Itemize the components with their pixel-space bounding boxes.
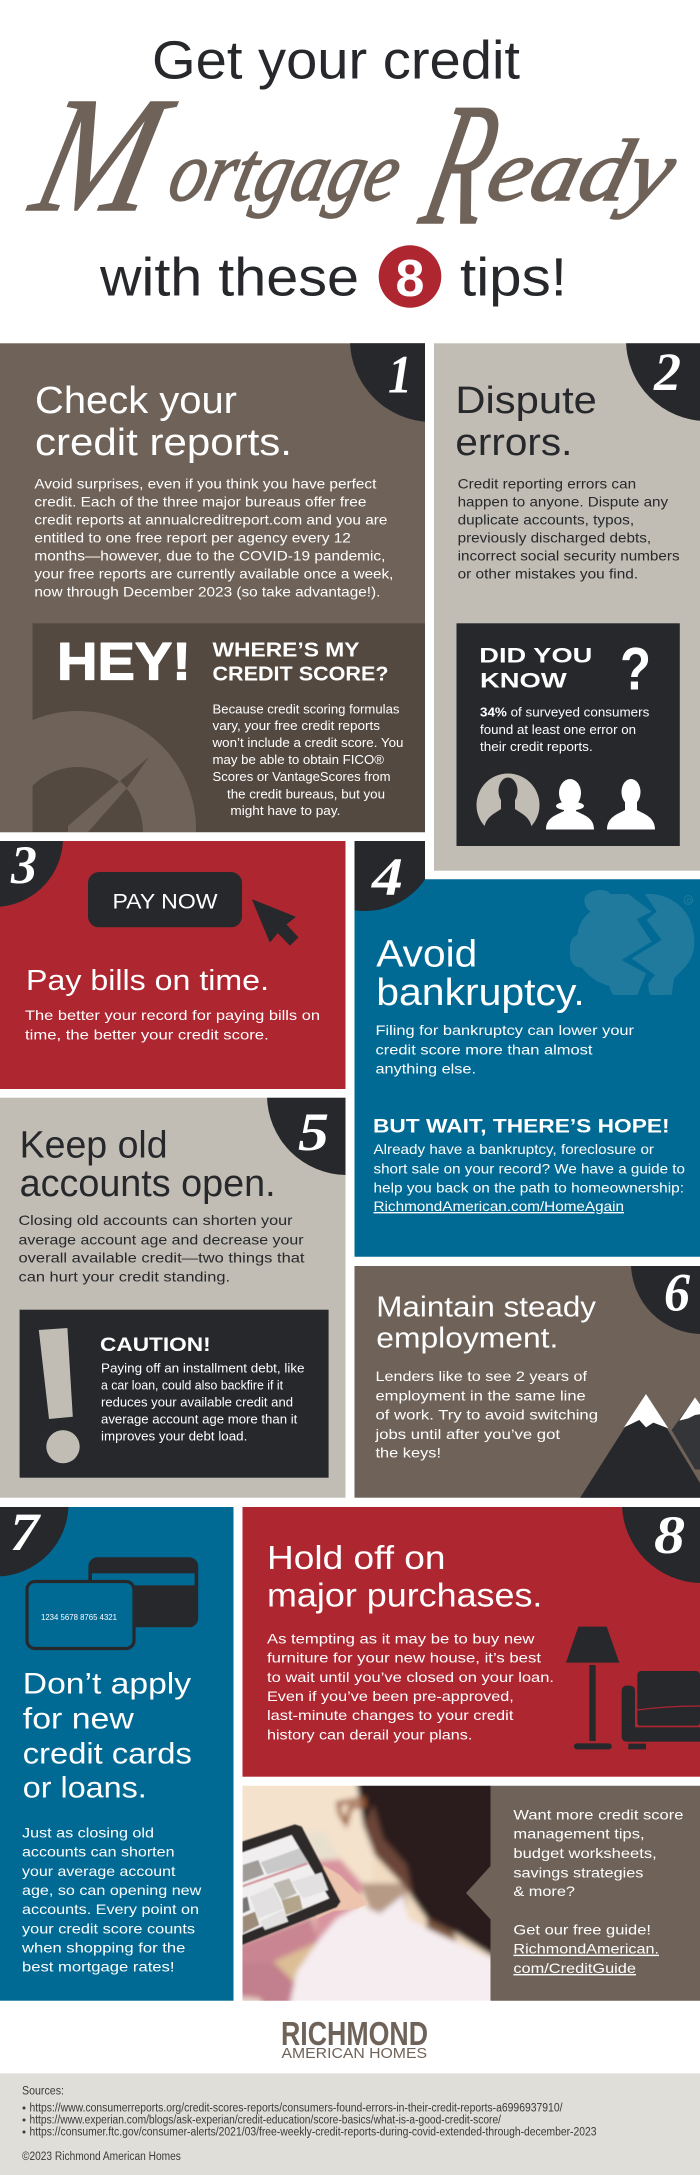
logo: Richmond American Homes (281, 2015, 428, 2062)
footer: sources (0, 2073, 700, 2175)
number badge 2: 2 (653, 342, 681, 402)
callout body: 34% of surveyed consumers (480, 705, 650, 720)
body text: tip 4: anything else. (376, 1061, 476, 1077)
body text: tip 5: average account age and decrease your (18, 1231, 304, 1247)
number badge 8: 8 (654, 1505, 685, 1565)
call to action text: savings strategies (513, 1864, 643, 1880)
badge: number 8: 8 (396, 250, 424, 308)
heading: don't apply for new credit cards or loans: or loans. (23, 1772, 147, 1805)
number badge 4 (354, 841, 426, 911)
number badge 4: 4 (371, 847, 403, 907)
panel: tip 3 pay bills on time (0, 841, 346, 1089)
heading: don't apply for new credit cards or loans: credit cards (23, 1737, 192, 1770)
subheading: but wait there's hope: BUT WAIT, THERE’S HOPE! (373, 1116, 670, 1138)
body text: tip 2: incorrect social security numbers (458, 547, 680, 563)
callout body: average account age more than it (101, 1411, 298, 1426)
body text: tip 7: when shopping for the (21, 1940, 186, 1956)
callout body: won’t include a credit score. You (211, 735, 404, 750)
heading: keep old accounts open: Keep old (20, 1124, 168, 1166)
call to action text: management tips, (513, 1826, 645, 1842)
body text: tip 1: your free reports are currently available once a week, (34, 566, 393, 582)
body text: tip 6: Lenders like to see 2 years of (376, 1368, 587, 1384)
body text: tip 4: credit score more than almost (376, 1041, 593, 1057)
call to action text: budget worksheets, (513, 1845, 657, 1861)
body text: hope: RichmondAmerican.com/HomeAgain (374, 1198, 624, 1214)
body text: tip 5: can hurt your credit standing. (18, 1269, 230, 1285)
body text: hope: short sale on your record? We have a guide to (374, 1160, 685, 1176)
callout body (101, 1360, 304, 1443)
question mark: ? (620, 635, 651, 702)
heading: dispute errors (455, 380, 597, 464)
body text: tip 7: accounts can shorten (22, 1844, 174, 1860)
panel: tip 1 check your credit reports (0, 343, 425, 832)
callout heading: CREDIT SCORE? (212, 664, 388, 686)
title line: tips: tips! (460, 248, 567, 308)
icon: exclamation mark (39, 1328, 80, 1463)
number badge 3: 3 (10, 835, 37, 895)
icon: lamp and sofa (566, 1627, 700, 1749)
title line: with these: with these (99, 248, 359, 308)
heading: don't apply for new credit cards or loans: Don’t apply (23, 1667, 191, 1700)
callout body: found at least one error on (480, 722, 636, 737)
body text: tip 1: Avoid surprises, even if you think you have perfect (34, 475, 377, 491)
body text: tip 8: last-minute changes to your credit (267, 1707, 514, 1723)
body text: tip 2: or other mistakes you find. (458, 566, 638, 582)
callout heading: DID YOU (479, 644, 592, 668)
heading: check your credit reports (35, 380, 292, 464)
body text: tip 5 (18, 1212, 305, 1285)
body text: tip 1: credit. Each of the three major bureaus offer free (34, 494, 367, 510)
callout body: might have to pay. (230, 803, 340, 818)
body text: tip 5: Closing old accounts can shorten your (18, 1212, 293, 1228)
body text: tip 2: duplicate accounts, typos, (458, 511, 634, 527)
call to action text: & more? (513, 1883, 575, 1899)
body text: tip 3: time, the better your credit score. (25, 1026, 269, 1042)
body text: tip 7 (21, 1824, 202, 1975)
panel: tip 2 dispute errors (434, 343, 700, 871)
heading: dispute errors: errors. (455, 422, 572, 464)
body text: tip 7: accounts. Every point on (22, 1901, 199, 1917)
callout body (211, 701, 404, 818)
icon: mountains (580, 1394, 700, 1498)
body text: hope: Already have a bankruptcy, foreclosure or (374, 1141, 654, 1157)
script heading: Mortgage Ready: ortgage (161, 124, 411, 219)
title block (13, 30, 700, 308)
heading: maintain steady employment: employment. (376, 1323, 558, 1355)
callout body (480, 705, 650, 754)
body text: tip 8: furniture for your new house, it’s best (267, 1650, 541, 1666)
body text: tip 7: age, so can opening new (22, 1882, 202, 1898)
callout heading (212, 640, 388, 686)
body text: tip 6 (374, 1368, 598, 1461)
heading: check your credit reports: Check your (35, 380, 237, 422)
sources list: https://www.consumerreports.org/credit-scores-reports/consumers-found-errors-in-their-credit-reports-a6996937910/ (30, 2103, 563, 2115)
heading: don't apply for new credit cards or loans: for new (23, 1702, 134, 1735)
pay now button: PAY NOW (112, 890, 218, 914)
badge: number 8 (379, 245, 441, 308)
script heading: Mortgage Ready: M (17, 64, 188, 246)
body text: tip 2: happen to anyone. Dispute any (458, 494, 668, 510)
call to action panel with notch (466, 1786, 700, 2001)
call to action text: Want more credit score (513, 1806, 684, 1822)
icon: cursor arrow (253, 900, 298, 945)
icon: credit cards (27, 1557, 198, 1648)
logo: Richmond American Homes: RICHMOND (281, 2015, 428, 2052)
heading: keep old accounts open (20, 1124, 276, 1205)
sources heading: Sources: (22, 2086, 64, 2098)
panel: tip 7 don't apply for new credit (0, 1507, 234, 2001)
callout body: may be able to obtain FICO® (212, 752, 384, 767)
number badge 1 (350, 343, 425, 422)
body text: tip 1: credit reports at annualcreditreport.com and you are (34, 511, 388, 527)
body text: tip 2: previously discharged debts, (458, 529, 651, 545)
heading: maintain steady employment (376, 1292, 597, 1355)
panel: tip 5 keep old accounts open (0, 1098, 346, 1498)
body text: tip 5: overall available credit—two things that (18, 1250, 305, 1266)
callout body: the credit bureaus, but you (227, 786, 385, 801)
call to action text: Get our free guide! (513, 1922, 651, 1938)
call to action text: com/CreditGuide (513, 1960, 636, 1976)
sources list: https://consumer.ftc.gov/consumer-alerts/2021/03/free-weekly-credit-reports-during-covid-extended-through-december-2023 (30, 2127, 596, 2139)
body text: hope (374, 1141, 685, 1214)
icon: three person silhouettes (476, 774, 655, 830)
body text: tip 6: the keys! (376, 1445, 441, 1461)
heading: avoid bankruptcy: bankruptcy. (376, 972, 585, 1014)
body text: tip 3 (25, 1007, 320, 1042)
body text: tip 8: As tempting as it may be to buy new (267, 1630, 535, 1646)
body text: tip 7: your average account (22, 1863, 176, 1879)
callout body: vary, your free credit reports (212, 718, 381, 733)
callout heading: KNOW (480, 669, 568, 693)
body text: tip 1 (34, 475, 393, 600)
body text: tip 8: to wait until you’ve closed on your loan. (267, 1669, 554, 1685)
call to action text: RichmondAmerican. (513, 1941, 659, 1957)
callout heading (479, 644, 592, 693)
callout heading: WHERE’S MY (212, 640, 360, 662)
title line: get your credit: Get your credit (152, 30, 520, 90)
heading: avoid bankruptcy: Avoid (376, 934, 477, 976)
logo: Richmond American Homes: AMERICAN HOMES (282, 2045, 427, 2062)
pay now button (88, 872, 242, 927)
number badge 2 (626, 343, 700, 421)
number badge 6 (631, 1266, 700, 1334)
callout body: Because credit scoring formulas (212, 701, 400, 716)
body text: tip 8: history can derail your plans. (267, 1726, 472, 1742)
icon: broken piggy bank (570, 890, 694, 995)
body text: tip 8: Even if you’ve been pre-approved, (267, 1688, 514, 1704)
number badge 8 (622, 1507, 700, 1583)
icon: gauge (32, 711, 196, 832)
body text: tip 7: best mortgage rates! (22, 1959, 174, 1975)
script heading: Mortgage Ready: eady (478, 122, 686, 220)
panel: tip 4 avoid bankruptcy (354, 841, 700, 1257)
sources list (22, 2103, 596, 2139)
number badge 7: 7 (10, 1502, 41, 1562)
body text: tip 1: entitled to one free report per agency every 12 (34, 529, 351, 545)
body text: tip 1: months—however, due to the COVID-19 pandemic, (34, 547, 385, 563)
body text: tip 6: jobs until after you’ve got (374, 1426, 560, 1442)
callout: where's my credit score (32, 623, 425, 832)
callout: did you know (456, 623, 680, 846)
body text: tip 3: The better your record for paying bills on (25, 1007, 320, 1023)
number badge 7 (0, 1507, 68, 1576)
heading: maintain steady employment: Maintain steady (376, 1292, 597, 1324)
callout body: improves your debt load. (101, 1428, 247, 1443)
panel: free guide photo and call to action (242, 1786, 700, 2001)
body text: tip 7: your credit score counts (22, 1920, 195, 1936)
script heading: Mortgage Ready: R (383, 68, 516, 261)
body text: tip 4 (376, 1022, 634, 1077)
number badge 6: 6 (664, 1263, 690, 1323)
heading: hold off on major purchases: major purchases. (267, 1577, 542, 1614)
number badge 5: 5 (298, 1102, 329, 1162)
call to action text (513, 1806, 684, 1976)
icon: credit cards: 1234 5678 8765 4321 (41, 1613, 118, 1622)
heading: don't apply for new credit cards or loans (23, 1667, 192, 1805)
body text: tip 8 (267, 1630, 554, 1742)
heading: dispute errors: Dispute (455, 380, 597, 422)
callout body: their credit reports. (480, 739, 593, 754)
heading: check your credit reports: credit reports. (35, 422, 292, 464)
body text: hope: help you back on the path to homeownership: (374, 1179, 684, 1195)
callout: caution (20, 1310, 329, 1478)
body text: tip 6: of work. Try to avoid switching (376, 1407, 598, 1423)
number badge 5 (267, 1098, 346, 1175)
number badge 1: 1 (388, 345, 412, 405)
sources list: https://www.experian.com/blogs/ask-experian/credit-education/score-basics/what-is-a-good-credit-score/ (30, 2115, 502, 2127)
heading: hold off on major purchases: Hold off on (267, 1539, 446, 1576)
HEY!: HEY! (57, 632, 191, 692)
body text: tip 6: employment in the same line (376, 1387, 586, 1403)
callout body: Scores or VantageScores from (212, 769, 390, 784)
heading: avoid bankruptcy (376, 934, 585, 1014)
body text: tip 2 (458, 475, 680, 582)
heading: pay bills on time: Pay bills on time. (26, 965, 269, 997)
heading: hold off on major purchases (267, 1539, 542, 1614)
photo: woman reading tablet (242, 1786, 490, 2001)
callout body: a car loan, could also backfire if it (101, 1378, 283, 1393)
callout body: Paying off an installment debt, like (101, 1360, 304, 1375)
body text: tip 1: now through December 2023 (so take advantage!). (34, 584, 380, 600)
copyright: ©2023 Richmond American Homes (22, 2151, 181, 2163)
body text: tip 4: Filing for bankruptcy can lower your (376, 1022, 634, 1038)
panel: tip 6 maintain steady employment (354, 1266, 700, 1498)
callout body: reduces your available credit and (101, 1394, 293, 1409)
panel: tip 8 hold off on major purchases (242, 1507, 700, 1777)
callout heading: CAUTION! (100, 1335, 211, 1356)
number badge 3 (0, 841, 63, 907)
body text: tip 2: Credit reporting errors can (458, 475, 636, 491)
body text: tip 7: Just as closing old (22, 1824, 154, 1840)
heading: keep old accounts open: accounts open. (20, 1163, 276, 1205)
